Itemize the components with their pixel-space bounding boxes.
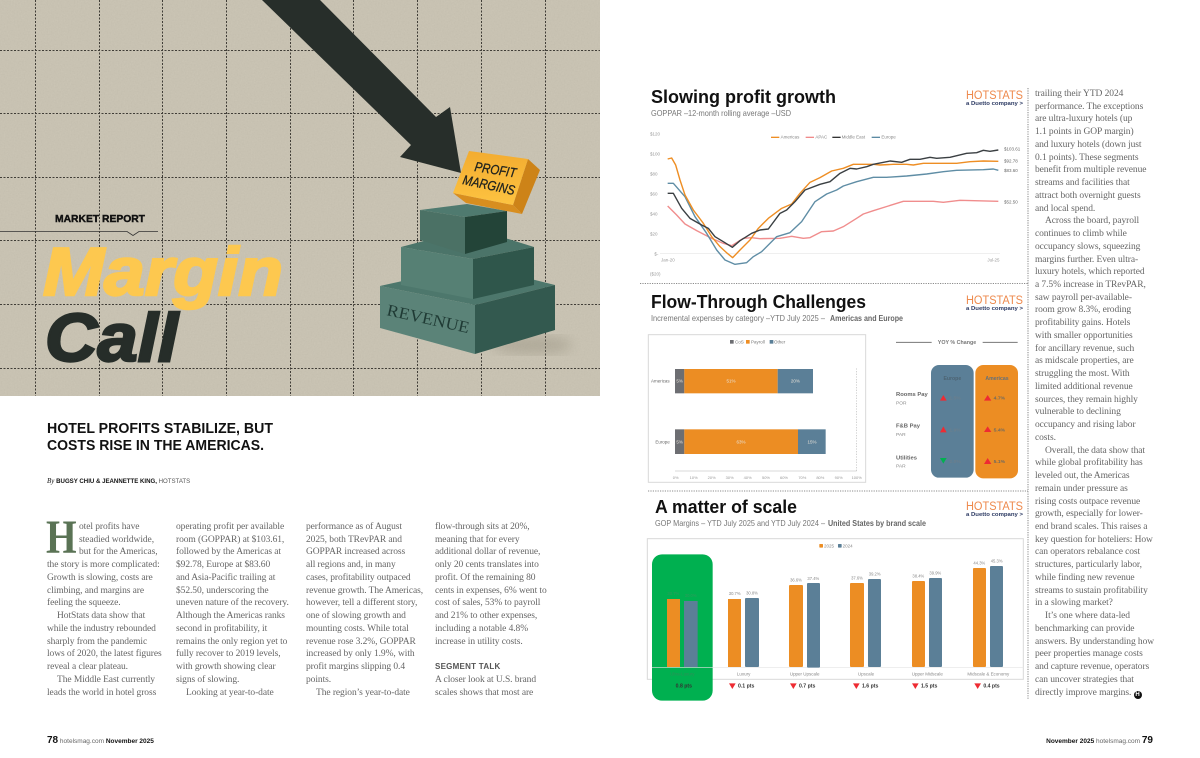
profit margins box: MARGINS xyxy=(461,172,516,198)
x axis xyxy=(673,475,862,480)
point changes: 1.6 pts xyxy=(862,684,878,690)
byline: By BUGSY CHIU & JEANNETTE KING, HOTSTATS xyxy=(47,477,190,485)
article column 2: operating profit per available room (GOPPAR) at $103.61, followed by the Americas at $92.78, Europe at $83.60 and Asia-Pacific trailing at $52.50, underscoring the uneven nature of the recovery. Although the Americas ranks second in profitability, it remains the only region yet to fully recover to 2019 levels, with growth showing clear signs of slowing. Looking at year-to-date xyxy=(176,522,289,698)
y axis labels: Jan-20 xyxy=(661,258,675,263)
bar chart: GOP margins by brand scale xyxy=(647,539,1023,701)
point changes: 0.8 pts xyxy=(676,684,692,690)
article column 5: H xyxy=(1135,692,1140,698)
x axis: 80% xyxy=(816,475,825,480)
revenue pyramid xyxy=(380,204,555,354)
bar: europe: 15% xyxy=(808,439,816,444)
row labels: F&B Pay xyxy=(896,424,921,430)
y axis labels: $120 xyxy=(650,131,660,136)
row labels: PAR xyxy=(896,464,906,470)
point changes: 0.1 pts xyxy=(738,684,754,690)
row labels: Utilities xyxy=(896,455,917,461)
y axis labels xyxy=(650,131,1000,276)
end labels: $103.61 xyxy=(1004,146,1021,151)
x axis: 0% xyxy=(673,475,679,480)
highlight: ultra-luxury xyxy=(652,554,713,701)
value labels: 30.0% xyxy=(685,593,697,598)
hero illustration xyxy=(0,0,600,396)
legend: Middle East xyxy=(842,135,866,140)
bar: europe xyxy=(655,429,826,454)
x axis: 100% xyxy=(852,475,862,480)
end labels: $52.50 xyxy=(1004,199,1018,204)
stacked bar chart xyxy=(648,335,866,482)
category labels: Ultra-Luxury xyxy=(670,672,695,677)
logo: hotstats: HOTSTATS xyxy=(966,295,1023,307)
logo: hotstats: a Duetto company > xyxy=(966,101,1024,107)
section label: MARKET REPORT xyxy=(55,214,145,225)
article column 4: flow-through sits at 20%, meaning that for every additional dollar of revenue, only 20 cents translates into profit. Of the remaining 80 cents in expenses, 6% went to cost of sales, 53% to payroll and 21% to other expenses, including a notable 4.8% increase in utility costs. SEGMENT TALK A closer look at U.S. brand scales shows that most are xyxy=(435,522,547,698)
panel: americas: Americas xyxy=(985,376,1009,382)
logo: hotstats: HOTSTATS xyxy=(966,90,1023,102)
footer left: 78 hotelsmag.com November 2025 xyxy=(47,735,154,746)
y axis labels: $40 xyxy=(650,211,658,216)
value labels: 30.8% xyxy=(746,591,758,596)
chart header: slowing profit growth: GOPPAR –12-month rolling average –USD xyxy=(651,108,791,118)
bar: europe: Europe xyxy=(655,439,670,444)
table heading: YOY % Change xyxy=(938,340,976,346)
value labels: 45.3% xyxy=(991,558,1003,563)
category labels: Upscale xyxy=(858,672,875,677)
point changes xyxy=(676,683,1000,690)
value labels: 30.7% xyxy=(667,591,680,596)
legend: 2025 xyxy=(824,544,834,549)
x axis: 90% xyxy=(835,475,843,480)
y axis labels: Jul-25 xyxy=(987,258,1000,263)
y axis labels: $- xyxy=(654,251,659,256)
y axis labels: ($20) xyxy=(650,271,661,276)
value labels: 39.9% xyxy=(929,570,942,575)
value labels: 38.4% xyxy=(912,574,925,579)
legend xyxy=(730,339,786,344)
chart header: flow-through challenges: Americas and Europe xyxy=(830,313,903,323)
panel: europe: 2.0% xyxy=(949,459,961,465)
x axis: 30% xyxy=(726,475,734,480)
category labels: Midscale & Economy xyxy=(967,672,1010,677)
end labels: $83.60 xyxy=(1004,168,1018,173)
chart header: flow-through challenges xyxy=(651,292,903,323)
panel: europe: 1.5% xyxy=(949,396,961,402)
section label xyxy=(0,214,158,236)
legend: Payroll xyxy=(751,339,765,344)
line chart: GOPPAR xyxy=(650,131,1021,276)
legend xyxy=(819,544,853,549)
chart header: slowing profit growth xyxy=(651,87,836,118)
x axis: 10% xyxy=(690,475,698,480)
legend: APAC xyxy=(815,135,828,140)
x axis: 60% xyxy=(780,475,788,480)
series xyxy=(668,150,998,264)
end labels xyxy=(1004,146,1021,204)
bar: americas: 5% xyxy=(676,379,683,384)
category labels: Luxury xyxy=(737,672,751,677)
legend: 2024 xyxy=(843,544,853,549)
value labels: 37.4% xyxy=(807,576,820,581)
panel: americas: 4.7% xyxy=(994,396,1006,402)
chart header: slowing profit growth: Slowing profit growth xyxy=(651,87,836,107)
point changes: 1.5 pts xyxy=(921,684,937,690)
paper background xyxy=(0,0,600,396)
bar: europe: 5% xyxy=(676,439,683,444)
logo: hotstats xyxy=(966,501,1024,518)
article column 1: H xyxy=(46,511,77,564)
legend: Americas xyxy=(781,135,800,140)
bar: europe: 63% xyxy=(737,439,745,444)
logo: hotstats: a Duetto company > xyxy=(966,512,1024,518)
category labels: Upper Midscale xyxy=(912,672,943,677)
YOY change table xyxy=(896,340,1018,478)
bars xyxy=(667,568,986,667)
value labels: 44.3% xyxy=(973,561,986,566)
panel: europe: 1.9% xyxy=(949,427,961,433)
logo: hotstats xyxy=(966,295,1024,312)
category labels xyxy=(670,672,1010,677)
logo: hotstats: HOTSTATS xyxy=(966,501,1023,513)
panel: americas xyxy=(975,365,1018,478)
bar: americas: 51% xyxy=(727,379,735,384)
value labels: 37.6% xyxy=(851,575,863,580)
label: revenue: REVENUE xyxy=(385,300,471,337)
arrow pointing down xyxy=(262,0,461,173)
end labels: $92.78 xyxy=(1004,159,1018,164)
chart header: flow-through challenges: Incremental expenses by category –YTD July 2025 – xyxy=(651,313,825,323)
profit margins box xyxy=(453,151,540,214)
chart header: a matter of scale: GOP Margins – YTD July 2025 and YTD July 2024 – xyxy=(655,518,825,528)
value labels xyxy=(667,558,1003,598)
row labels: PAR xyxy=(896,432,906,438)
footer right: November 2025 hotelsmag.com 79 xyxy=(1046,735,1153,746)
y axis labels: $60 xyxy=(650,191,658,196)
point changes: 0.7 pts xyxy=(799,684,815,690)
chart header: a matter of scale xyxy=(655,497,926,528)
panel: americas: 5.4% xyxy=(994,427,1006,433)
article column 3: performance as of August 2025, both TRevPAR and GOPPAR increased across all regions and, in many cases, profitability outpaced revenue growth. The Americas, however, tell a different story, one of slowing growth and mounting costs. While total revenue rose 3.2%, GOPPAR increased by only 1.9%, with profit margins slipping 0.4 points. The region’s year-to-date xyxy=(306,522,423,698)
panel: americas: 5.1% xyxy=(994,459,1006,465)
bar: americas: Americas xyxy=(651,379,670,384)
point changes: 0.4 pts xyxy=(983,684,1000,690)
chart header: a matter of scale: United States by brand scale xyxy=(828,518,926,528)
y axis labels: $20 xyxy=(650,231,658,236)
headline xyxy=(47,421,273,454)
title xyxy=(43,234,283,376)
row labels: POR xyxy=(896,400,907,406)
legend xyxy=(771,135,896,140)
title: Margin xyxy=(43,234,283,310)
headline: HOTEL PROFITS STABILIZE, BUT xyxy=(47,421,273,437)
y axis labels: $80 xyxy=(650,171,658,176)
logo: hotstats xyxy=(966,90,1024,107)
profit margins box: PROFIT xyxy=(474,159,519,181)
separators xyxy=(640,88,1028,700)
article column 5: trailing their YTD 2024 performance. The exceptions are ultra-luxury hotels (up 1.1 points in GOP margin) and luxury hotels (down just 0.1 points). These segments benefit from multiple revenue streams and facilities that attract both overnight guests and local spend. Across the board, payroll continues to climb while occupancy slows, squeezing margins further. Even ultra- luxury hotels, which reported a 7.5% increase in TRevPAR, saw payroll per-available- room grow 8.3%, eroding profitability gains. Hotels with smaller opportunities for ancillary revenue, such as midscale properties, are struggling the most. With limited additional revenue sources, they remain highly vulnerable to declining occupancy and rising labor costs. Overall, the data show that while global profitability has leveled out, the Americas remain under pressure as rising costs outpace revenue growth, especially for lower- end brand scales. This raises a key question for hoteliers: How can operators rebalance cost structures, particularly labor, while finding new revenue streams to sustain profitability in a slowing market? It’s one where data-led benchmarking can provide answers. By understanding how peer properties manage costs and capture revenue, operators can uncover strategies that directly improve margins. xyxy=(1035,89,1154,698)
row labels xyxy=(896,392,928,470)
headline: COSTS RISE IN THE AMERICAS. xyxy=(47,438,264,454)
legend: Europe xyxy=(881,135,896,140)
pyramid shadow xyxy=(492,336,572,354)
legend: CoS xyxy=(735,339,744,344)
chart header: a matter of scale: A matter of scale xyxy=(655,497,797,517)
value labels: 39.2% xyxy=(869,572,881,577)
value labels: 30.7% xyxy=(729,591,741,596)
value labels: 36.6% xyxy=(790,577,802,582)
x axis: 40% xyxy=(744,475,752,480)
x axis: 20% xyxy=(708,475,716,480)
bar: americas xyxy=(651,369,813,393)
x axis: 70% xyxy=(798,475,807,480)
row labels: Rooms Pay xyxy=(896,392,928,398)
graph paper grid xyxy=(0,0,600,396)
logo: hotstats: a Duetto company > xyxy=(966,306,1024,312)
x axis: 50% xyxy=(762,475,770,480)
bar: americas: 20% xyxy=(791,379,800,384)
y axis labels: $100 xyxy=(650,151,660,156)
article column 1: otel profits have steadied worldwide, but for the Americas, the story is more complicated: Growth is slowing, costs are climbing, and margins are feeling the squeeze. HotStats data show that while the industry rebounded sharply from the pandemic lows of 2020, the latest figures reveal a clear plateau. The Middle East currently leads the world in hotel gross xyxy=(47,522,162,698)
panel: europe xyxy=(931,365,974,478)
legend: Other xyxy=(774,339,786,344)
panel: europe: Europe xyxy=(943,376,961,382)
title: Call xyxy=(45,300,180,376)
category labels: Upper Upscale xyxy=(790,672,820,677)
chart header: flow-through challenges: Flow-Through Challenges xyxy=(651,292,866,312)
